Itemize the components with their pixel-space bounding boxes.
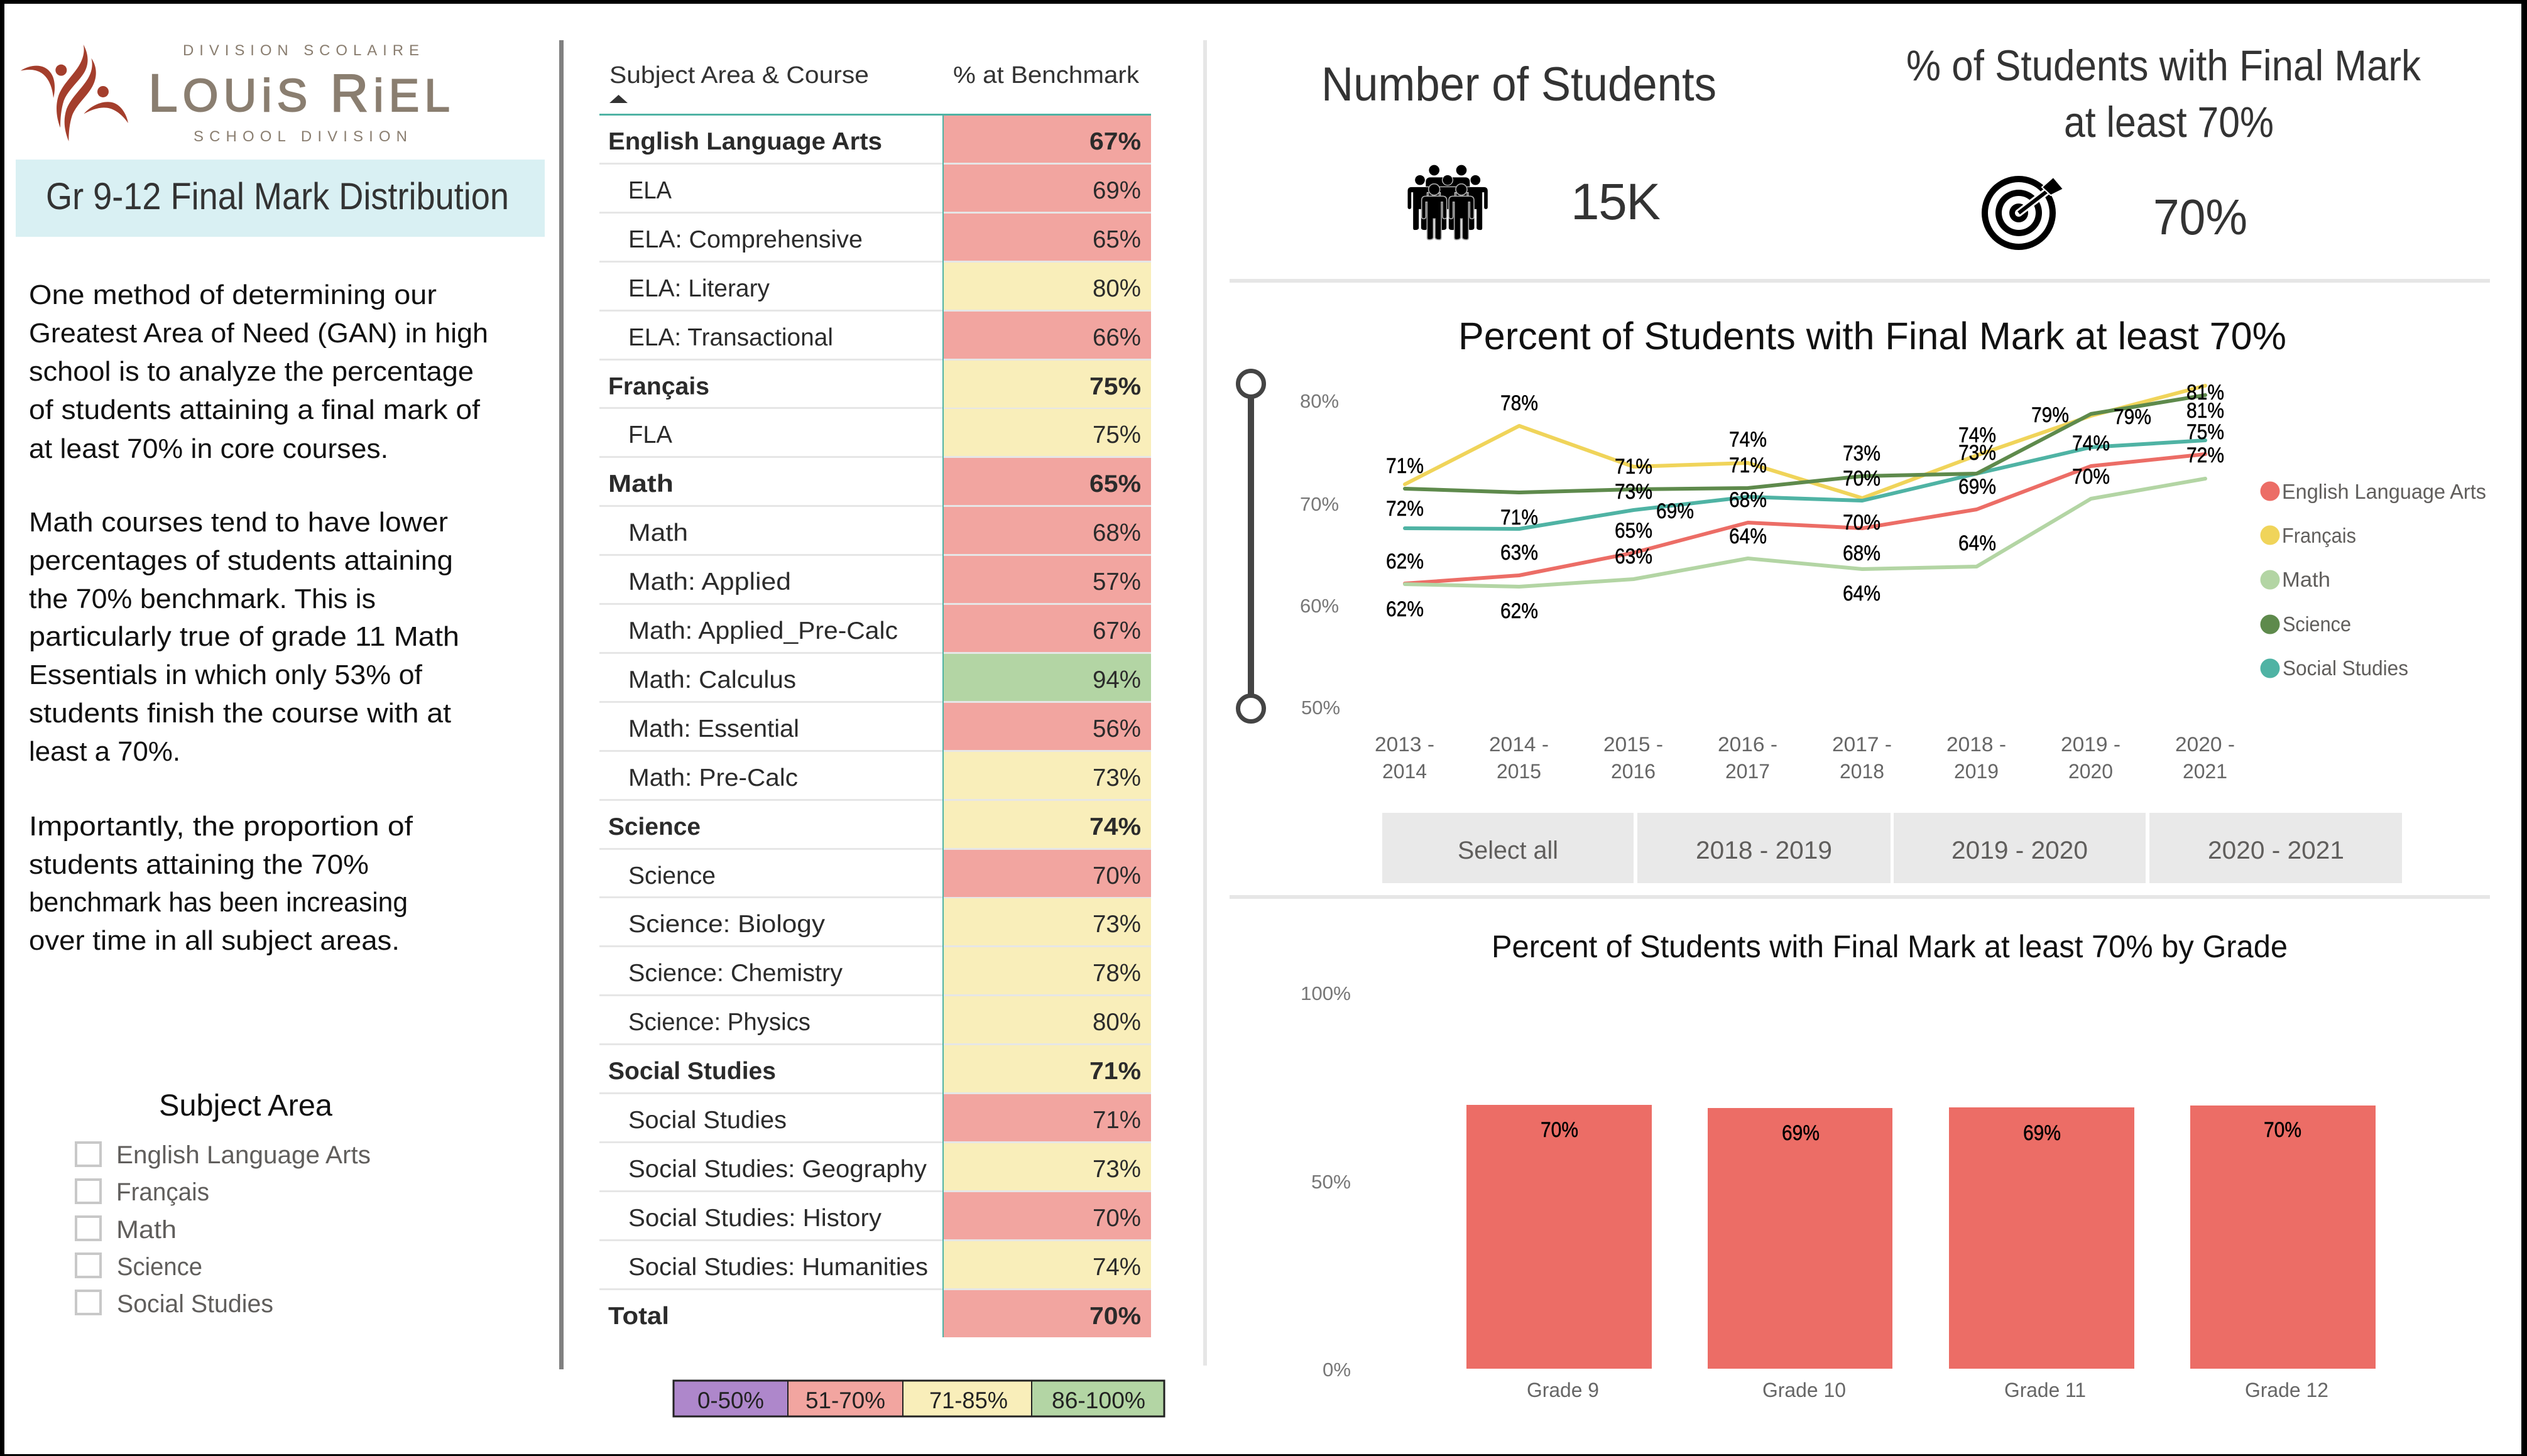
text block: narrative: benchmark has been increasing (29, 887, 408, 918)
data labels: 64% (1958, 531, 1996, 555)
data labels: 74% (1958, 423, 1996, 447)
x axis labels: 2019 (1954, 760, 1999, 783)
data labels: 71% (1729, 454, 1767, 477)
table row labels: Social Studies: Geography (628, 1156, 927, 1183)
table percent values: 67% (1089, 128, 1141, 155)
text block: narrative: particularly true of grade 11 Math (29, 621, 459, 652)
KPI: number of students (1321, 58, 1717, 240)
data labels: 73% (1615, 480, 1652, 504)
table percent values: 73% (1093, 764, 1141, 791)
title banner (16, 160, 545, 237)
table row labels: Math: Applied (628, 568, 791, 595)
table row labels: Math: Applied_Pre-Calc (628, 617, 898, 644)
table header: % at Benchmark (953, 62, 1140, 89)
legend: benchmark ranges: 0-50% (697, 1388, 764, 1413)
table percent values: 74% (1089, 813, 1141, 840)
table percent values: 74% (1093, 1254, 1141, 1281)
table row labels: Science: Physics (628, 1009, 810, 1036)
table percent values: 73% (1093, 911, 1141, 938)
table percent values: 80% (1093, 275, 1141, 302)
table row labels: ELA: Comprehensive (628, 226, 863, 253)
y axis labels: 70% (1300, 493, 1339, 515)
table row labels: Total (608, 1303, 669, 1330)
year slider (1238, 371, 1264, 721)
data labels: 81% (2186, 399, 2224, 423)
data labels: 72% (2186, 443, 2224, 467)
y axis labels: 50% (1301, 697, 1340, 719)
x axis labels: 2019 - (2061, 733, 2120, 756)
table row labels: ELA: Literary (628, 275, 770, 302)
data labels (1386, 381, 2224, 623)
text block: narrative: at least 70% in core courses. (29, 433, 388, 464)
data labels: 62% (1386, 597, 1424, 621)
table percent values: 70% (1093, 1205, 1141, 1232)
data labels: 69% (1656, 499, 1694, 523)
bar chart title: Percent of Students with Final Mark at least 70% by Grade (1492, 929, 2288, 964)
icon: group of people (1407, 165, 1488, 240)
slicer: subject area: Français (116, 1178, 209, 1206)
slicer: subject area: Social Studies (117, 1290, 273, 1318)
bar value labels: 70% (1541, 1118, 1578, 1142)
data labels: 79% (2114, 405, 2151, 429)
table row labels: FLA (628, 421, 672, 448)
KPI: percent of students at least 70: at least 70% (2064, 98, 2274, 146)
line chart: percent of students by year (1238, 315, 2486, 783)
data labels: 62% (1500, 599, 1538, 623)
bar value labels: 69% (2023, 1121, 2061, 1145)
text block: narrative: school is to analyze the percentage (29, 356, 474, 387)
table row labels: Math: Pre-Calc (628, 764, 798, 791)
grade labels: Grade 9 (1527, 1379, 1599, 1401)
KPI: number of students: Number of Students (1321, 58, 1717, 111)
x axis labels: 2018 - (1946, 733, 2006, 756)
data labels: 64% (1729, 524, 1767, 548)
icon: logo figures (21, 45, 128, 141)
x axis labels: 2015 - (1603, 733, 1663, 756)
value: 70%: 70% (2153, 189, 2247, 245)
y axis labels (1300, 390, 1340, 719)
table percent values: 65% (1093, 226, 1141, 253)
bar chart axis: 50% (1311, 1171, 1351, 1193)
table row labels: Science (608, 813, 701, 840)
table percent values: 71% (1093, 1107, 1141, 1134)
logo: Louis Riel School Division (21, 42, 450, 145)
KPI: percent of students at least 70: % of Students with Final Mark (1906, 41, 2421, 90)
slicer: subject area: English Language Arts (116, 1141, 371, 1169)
table percent values: 66% (1093, 324, 1141, 351)
x axis labels: 2014 (1382, 760, 1427, 783)
bars (1466, 1105, 2376, 1369)
table row labels: ELA: Transactional (628, 324, 833, 351)
data labels: 69% (1958, 475, 1996, 499)
table: subject area and course benchmark (599, 62, 1151, 1337)
year filter buttons (1382, 813, 2402, 883)
chart legend: Français (2282, 524, 2356, 547)
legend: benchmark ranges (674, 1381, 1164, 1416)
table row labels: Social Studies (628, 1107, 787, 1134)
legend: benchmark ranges: 71-85% (929, 1388, 1008, 1413)
table percent values: 70% (1093, 862, 1141, 889)
data labels: 68% (1729, 488, 1767, 512)
text block: narrative: over time in all subject areas. (29, 925, 400, 956)
slicer: subject area: Subject Area (159, 1089, 332, 1122)
data labels: 73% (1843, 442, 1880, 465)
x axis labels: 2020 (2068, 760, 2113, 783)
year filter buttons: 2018 - 2019 (1696, 837, 1832, 864)
data labels: 71% (1386, 454, 1424, 478)
table percent values: 68% (1093, 519, 1141, 546)
text block: narrative: Importantly, the proportion of (29, 811, 413, 842)
value: 15K: 15K (1571, 173, 1661, 231)
table cell fills (599, 116, 1151, 1337)
bar value labels: 69% (1782, 1121, 1820, 1145)
x axis labels: 2017 (1725, 760, 1770, 783)
data labels: 65% (1615, 519, 1652, 543)
grade labels: Grade 10 (1762, 1379, 1846, 1401)
data labels: 79% (2031, 403, 2069, 427)
y axis labels: 60% (1300, 595, 1339, 617)
chart legend: Science (2283, 612, 2351, 636)
x axis labels: 2021 (2183, 760, 2227, 783)
text block: narrative: students attaining the 70% (29, 849, 369, 880)
table row labels: English Language Arts (608, 128, 882, 155)
bar chart: percent by grade (1301, 929, 2376, 1401)
data labels: 63% (1615, 545, 1652, 568)
grade labels (1527, 1379, 2328, 1401)
KPI: percent of students at least 70 (1906, 41, 2421, 250)
logo text: Louis Riel: LOUiS RiEL (148, 63, 450, 122)
data labels: 74% (1729, 428, 1767, 452)
x axis labels: 2015 (1497, 760, 1541, 783)
data labels: 63% (1500, 541, 1538, 565)
logo text: division scolaire: DIVISION SCOLAIRE (183, 42, 419, 59)
chart lines (1405, 386, 2205, 587)
x axis labels: 2014 - (1489, 733, 1549, 756)
slicer: subject area (76, 1089, 371, 1318)
table row labels: ELA (628, 177, 672, 204)
table header (599, 62, 1151, 116)
table row labels: Social Studies (608, 1058, 776, 1085)
table percent values: 65% (1089, 470, 1141, 497)
data labels: 70% (2072, 465, 2110, 489)
x axis labels: 2018 (1840, 760, 1884, 783)
text block: narrative: One method of determining our (29, 280, 437, 310)
icon: target with arrow (1982, 176, 2063, 250)
table percent values: 70% (1089, 1303, 1141, 1330)
data labels: 70% (1843, 467, 1880, 491)
text block: narrative: Greatest Area of Need (GAN) in high (29, 318, 488, 349)
chart legend: Social Studies (2283, 656, 2408, 680)
text block: narrative: of students attaining a final mark of (29, 394, 481, 425)
bar value labels (1541, 1118, 2301, 1145)
table row labels (608, 128, 928, 1330)
table row labels: Science: Chemistry (628, 960, 843, 987)
data labels: 71% (1500, 506, 1538, 530)
data labels: 70% (1843, 511, 1880, 535)
chart title: Percent of Students with Final Mark at least 70% (1458, 315, 2286, 357)
table percent values: 67% (1093, 617, 1141, 644)
slicer: subject area: Math (116, 1216, 177, 1244)
data labels: 62% (1386, 550, 1424, 573)
table row labels: Math (608, 470, 674, 497)
legend: benchmark ranges: 51-70% (805, 1388, 885, 1413)
text block: narrative: percentages of students attaining (29, 545, 453, 576)
legend: benchmark ranges: 86-100% (1052, 1388, 1145, 1413)
table row labels: Math (628, 519, 688, 546)
data labels: 72% (1386, 497, 1424, 521)
table row labels: Science (628, 862, 716, 889)
year filter buttons: 2020 - 2021 (2208, 837, 2344, 864)
table percent values: 56% (1093, 715, 1141, 742)
table percent values: 80% (1093, 1009, 1141, 1036)
table percent values: 71% (1089, 1058, 1141, 1085)
bar chart axis: 0% (1323, 1359, 1351, 1381)
chart legend: English Language Arts (2282, 480, 2486, 503)
table row labels: Math: Calculus (628, 666, 796, 693)
data labels: 81% (2186, 381, 2224, 405)
table percent values: 69% (1093, 177, 1141, 204)
text block: narrative: Math courses tend to have lower (29, 507, 448, 538)
data labels: 71% (1615, 455, 1652, 479)
table percent values (1089, 128, 1141, 1330)
data labels: 68% (1843, 541, 1880, 565)
data labels: 74% (2072, 432, 2110, 455)
x axis labels (1375, 733, 2235, 783)
bar chart axis: 100% (1301, 982, 1351, 1004)
x axis labels: 2017 - (1832, 733, 1892, 756)
year filter buttons: Select all (1458, 837, 1558, 864)
grade labels: Grade 12 (2245, 1379, 2328, 1401)
table percent values: 75% (1089, 373, 1141, 400)
table percent values: 94% (1093, 666, 1141, 693)
text block: narrative (29, 280, 488, 956)
text block: narrative: the 70% benchmark. This is (29, 584, 376, 614)
grade labels: Grade 11 (2004, 1379, 2086, 1401)
text block: narrative: students finish the course with at (29, 698, 451, 729)
data labels: 73% (1958, 441, 1996, 465)
table row labels: Science: Biology (628, 911, 826, 938)
slicer: subject area: Science (117, 1253, 202, 1281)
chart legend (2261, 480, 2486, 680)
y axis labels: 80% (1300, 390, 1339, 412)
x axis labels: 2013 - (1375, 733, 1434, 756)
x axis labels: 2016 - (1718, 733, 1777, 756)
data labels: 64% (1843, 582, 1880, 606)
table row labels: Social Studies: Humanities (628, 1254, 928, 1281)
table row labels: Social Studies: History (628, 1205, 882, 1232)
data labels: 78% (1500, 391, 1538, 415)
table percent values: 57% (1093, 568, 1141, 595)
table percent values: 75% (1093, 421, 1141, 448)
table header: Subject Area & Course (609, 62, 869, 89)
logo text: school division: SCHOOL DIVISION (194, 128, 407, 145)
text block: narrative: least a 70%. (29, 736, 180, 767)
chart legend: Math (2282, 568, 2330, 591)
x axis labels: 2016 (1611, 760, 1656, 783)
x axis labels: 2020 - (2175, 733, 2235, 756)
text block: narrative: Essentials in which only 53% of (29, 660, 423, 690)
table percent values: 73% (1093, 1156, 1141, 1183)
bar chart axis (1301, 982, 1351, 1381)
bar value labels: 70% (2264, 1118, 2301, 1142)
year filter buttons: 2019 - 2020 (1951, 837, 2088, 864)
title banner: Gr 9-12 Final Mark Distribution (46, 175, 509, 217)
table percent values: 78% (1093, 960, 1141, 987)
table row labels: Math: Essential (628, 715, 799, 742)
data labels: 75% (2186, 420, 2224, 444)
table row labels: Français (608, 373, 709, 400)
